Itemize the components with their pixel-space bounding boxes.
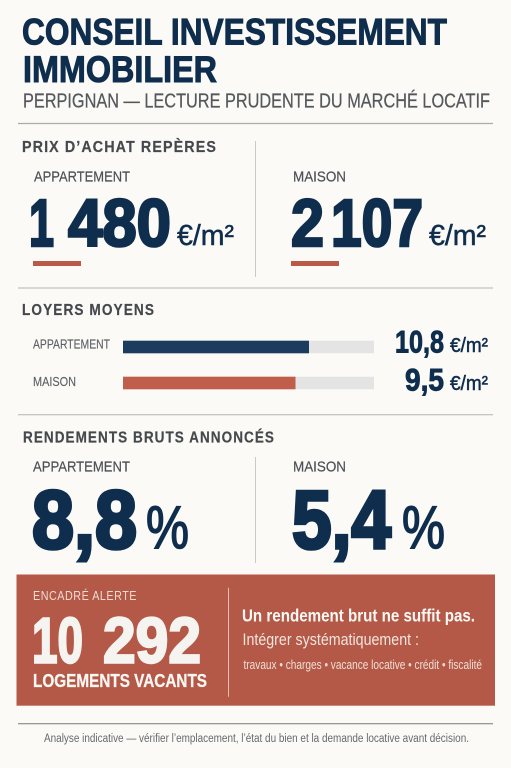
stat: maison price: €/m² [429,220,486,252]
stat: maison yield [292,460,445,566]
bar chart row: appartement: 10,8 [395,323,444,359]
alert number [32,604,201,676]
stat: maison yield: MAISON [293,460,346,476]
stat: maison price: MAISON [293,170,346,186]
stat: maison price: 2 [291,186,324,261]
alert number: 10 [32,604,83,676]
heading: loyers: LOYERS MOYENS [22,302,155,319]
stat: maison price: 107 [331,186,423,261]
stat: appartement price: €/m² [177,220,234,252]
title [22,11,447,90]
panel: rendements bruts [23,429,445,566]
bar chart row: maison: €/m² [450,373,488,395]
alert message: Un rendement brut ne suffit pas. [242,606,475,626]
panel: loyers moyens [22,302,488,398]
header [22,11,490,113]
stat: maison price [291,170,486,266]
bar chart row: appartement [33,323,488,359]
bar chart row: appartement: €/m² [450,335,488,357]
heading: rendements: RENDEMENTS BRUTS ANNONCÉS [23,429,275,446]
bar chart row: maison: 9,5 [405,362,444,398]
panel: encadré alerte [16,574,495,706]
alert message [242,606,482,672]
panel: prix d'achat [22,139,486,277]
stat: appartement price [29,170,234,266]
alert label: ENCADRÉ ALERTE [33,588,137,603]
stat: appartement price: 480 [68,186,171,261]
alert message: Intégrer systématiquement : [242,630,419,649]
stat: maison yield: % [402,494,445,561]
stat: appartement yield: % [146,494,189,561]
stat: appartement price: APPARTEMENT [34,170,130,186]
stat: appartement yield [32,460,189,566]
alert number: 292 [103,604,201,676]
heading: prix d'achat: PRIX D’ACHAT REPÈRES [22,139,217,156]
title: IMMOBILIER [23,48,217,90]
bar chart row: maison: MAISON [33,374,76,389]
bar chart row: maison [33,362,488,398]
stat: appartement yield: 8,8 [32,473,137,566]
stat: appartement yield: APPARTEMENT [33,460,130,476]
stat: appartement price: 1 [29,186,54,261]
title: CONSEIL INVESTISSEMENT [22,11,447,53]
alert caption: LOGEMENTS VACANTS [33,671,207,691]
stat: maison yield: 5,4 [292,473,391,566]
bar chart row: appartement: APPARTEMENT [33,337,110,352]
